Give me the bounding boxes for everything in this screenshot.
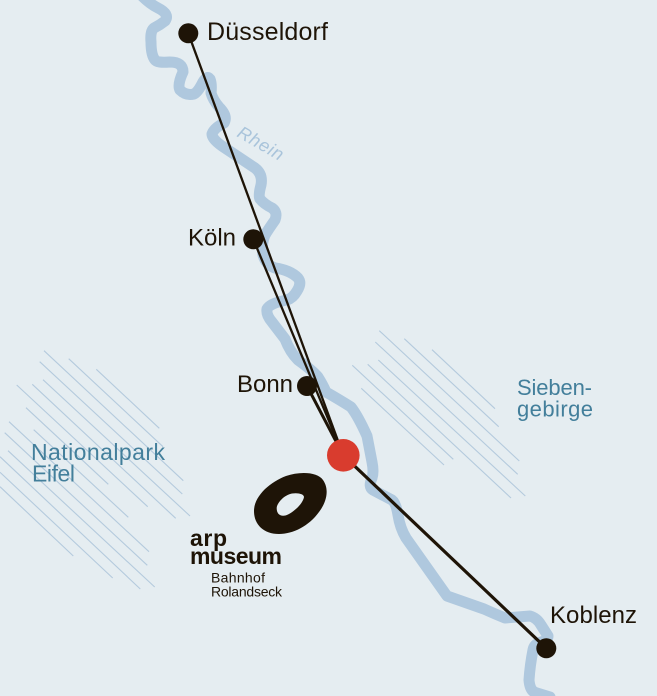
logo text: arp museum: museum bbox=[190, 543, 282, 569]
logo: ring shape bbox=[254, 473, 327, 534]
city: Köln: Köln bbox=[188, 225, 236, 252]
logo text: arp museum bbox=[190, 525, 282, 569]
logo text: arp museum: arp bbox=[190, 525, 227, 551]
city: Koblenz: Koblenz bbox=[550, 602, 637, 629]
city: Bonn: Bonn bbox=[237, 371, 293, 398]
city: Koblenz bbox=[536, 602, 637, 658]
hatching: Siebengebirge bbox=[352, 331, 525, 498]
label: Siebengebirge: gebirge bbox=[517, 397, 593, 422]
label: Siebengebirge: Sieben- bbox=[517, 375, 592, 400]
hatching: Nationalpark Eifel bbox=[0, 351, 190, 589]
city: Düsseldorf: Düsseldorf bbox=[207, 18, 328, 46]
label: Nationalpark Eifel: Eifel bbox=[32, 461, 75, 487]
label: Nationalpark Eifel bbox=[31, 439, 166, 487]
label: Rhein: Rhein bbox=[234, 122, 287, 164]
logo subtitle: Bahnhof Rolandseck bbox=[211, 570, 283, 600]
connection lines to Arp Museum bbox=[188, 33, 546, 648]
marker: Arp Museum location bbox=[327, 439, 360, 472]
river: Rhein bbox=[142, 0, 550, 696]
city: Köln bbox=[188, 225, 263, 252]
label: Nationalpark Eifel: Nationalpark bbox=[31, 439, 166, 465]
label: Siebengebirge bbox=[517, 375, 593, 422]
logo subtitle: Bahnhof Rolandseck: Bahnhof bbox=[211, 570, 265, 586]
logo subtitle: Bahnhof Rolandseck: Rolandseck bbox=[211, 584, 283, 600]
